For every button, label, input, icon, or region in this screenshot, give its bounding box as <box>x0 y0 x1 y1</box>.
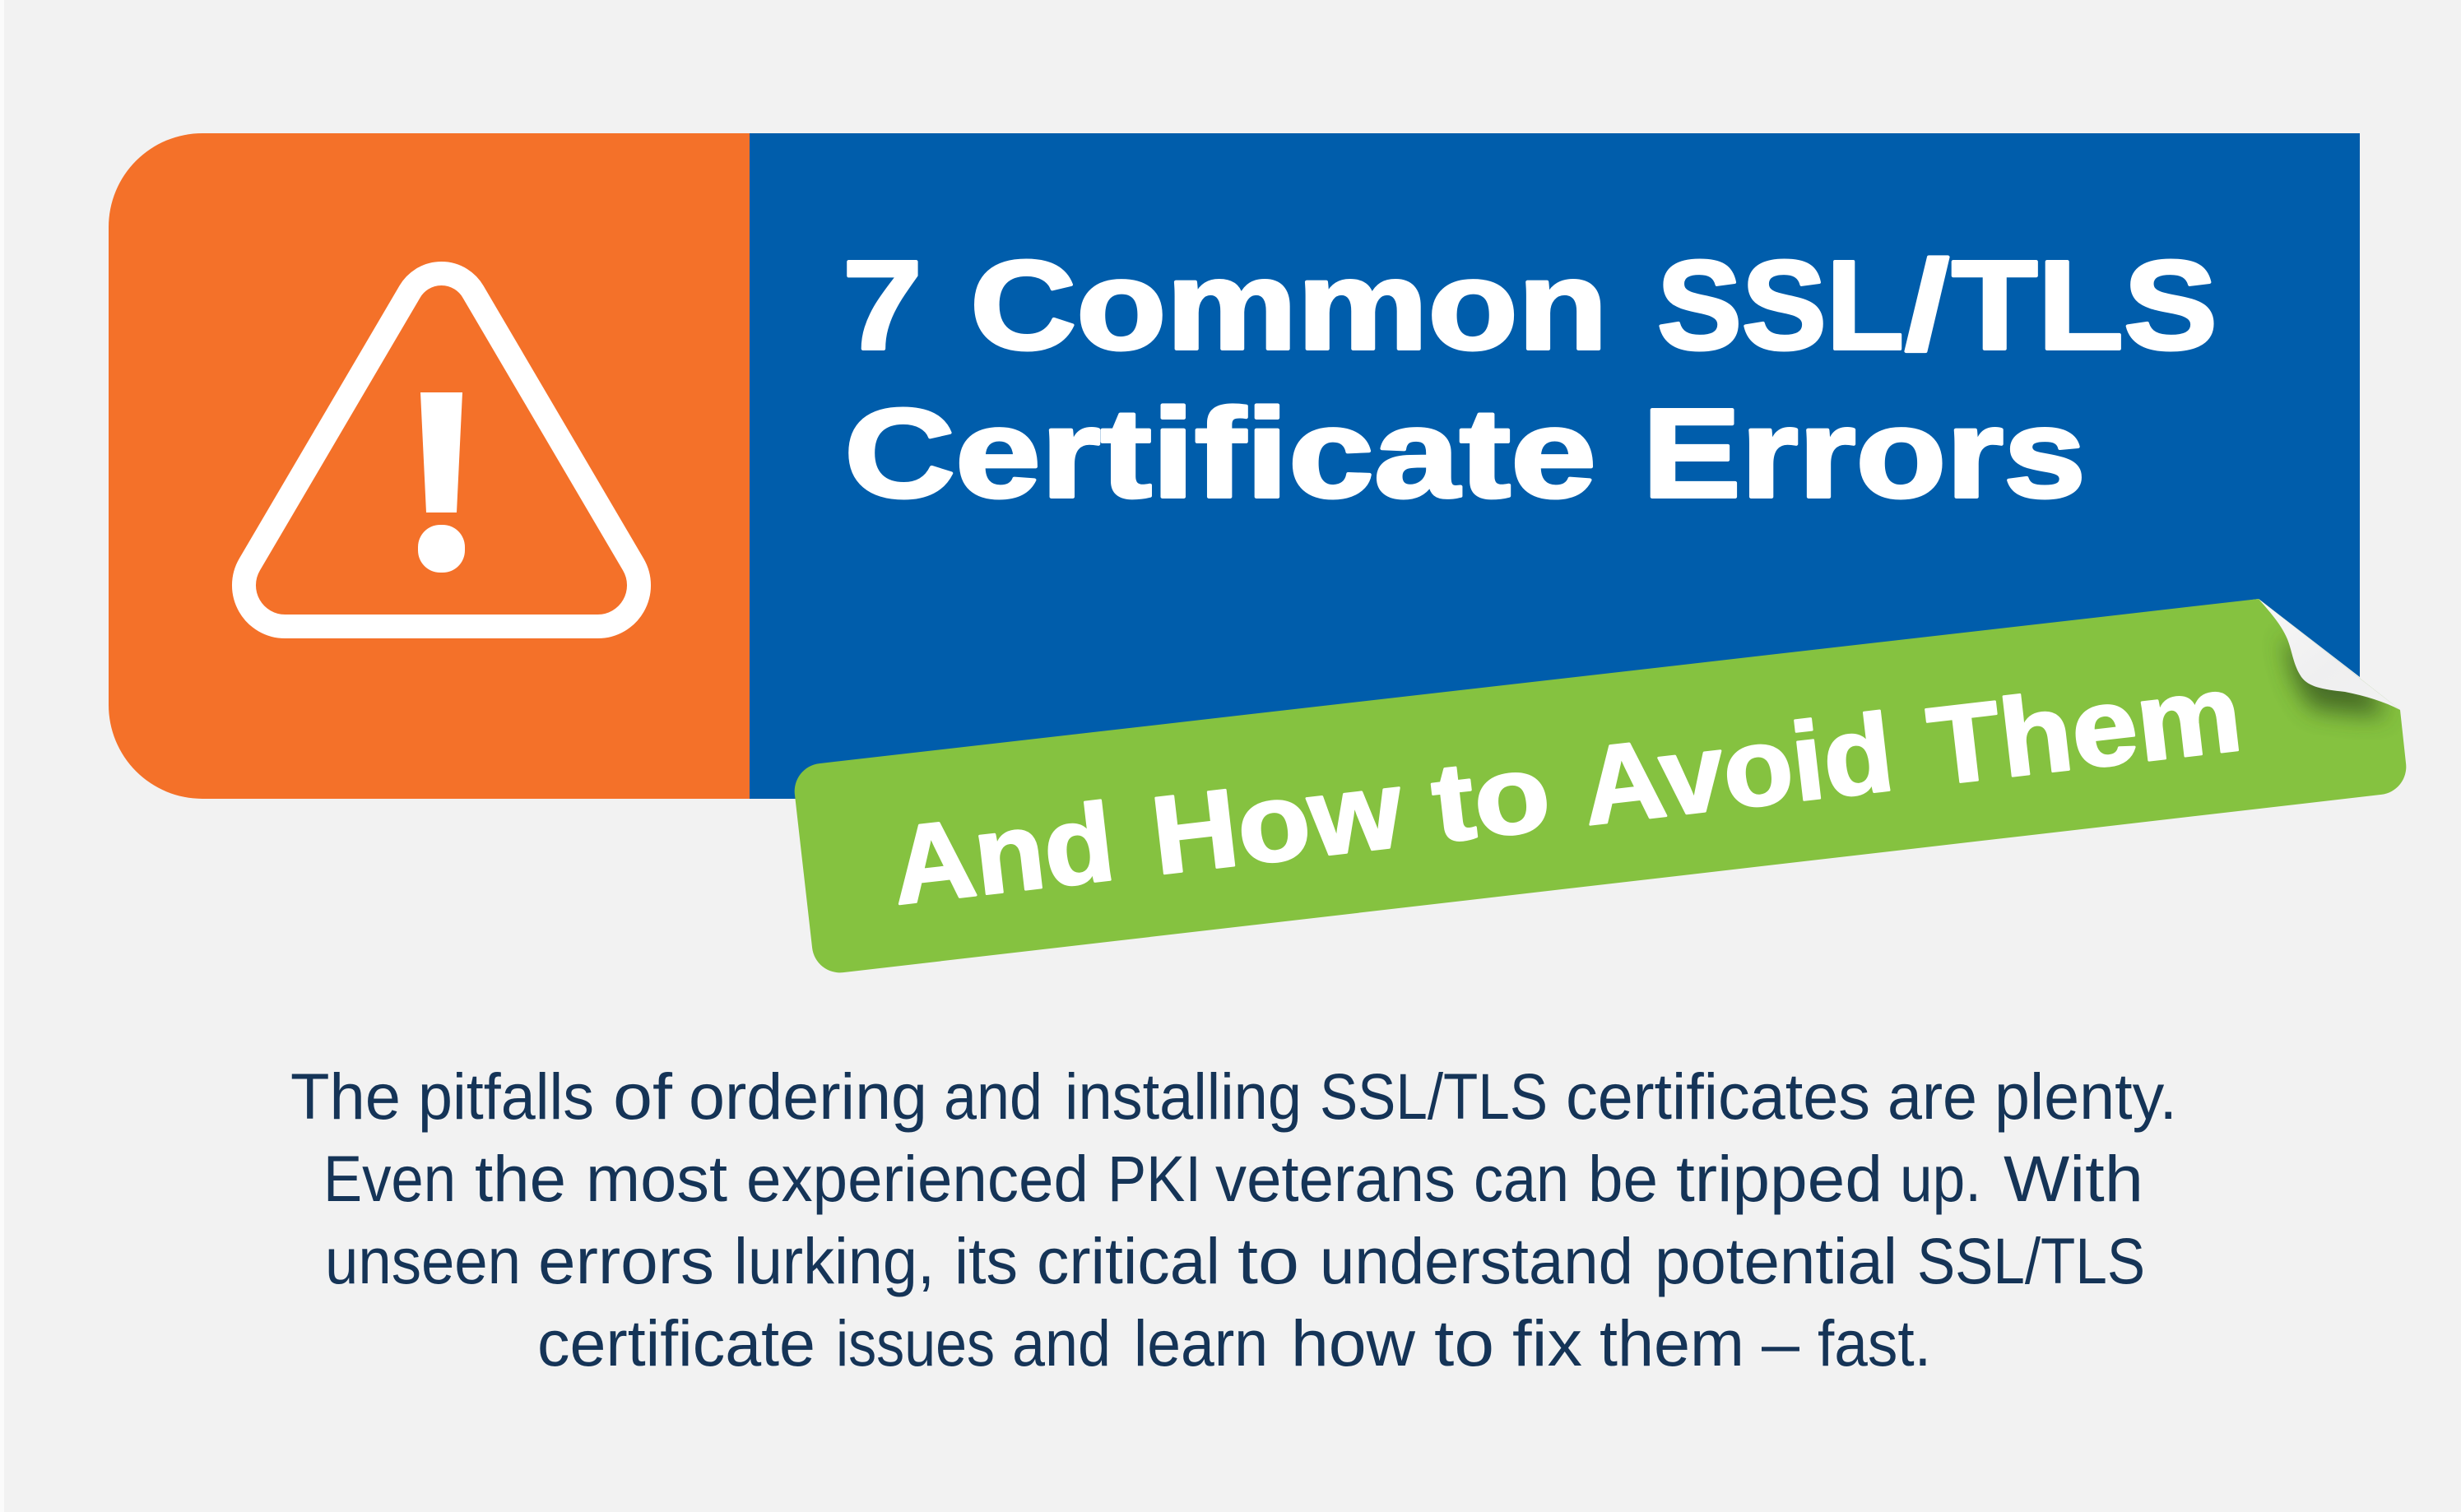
text block: introduction: can <box>1474 1142 1569 1215</box>
text block: introduction: tripped <box>1676 1142 1883 1215</box>
text block: introduction: are <box>1888 1060 1977 1133</box>
text block: introduction: to <box>1434 1306 1494 1380</box>
panel: green peeling sticker <box>795 599 2406 972</box>
title: Errors <box>1642 383 2086 524</box>
text block: introduction: to <box>1237 1224 1299 1297</box>
sticker text: Them <box>1922 652 2248 809</box>
text block: introduction: lurking, <box>734 1224 935 1297</box>
text block: introduction: them <box>1600 1306 1744 1380</box>
text block: introduction: certificates <box>1566 1060 1870 1133</box>
text block: introduction: issues <box>836 1306 995 1380</box>
text block: introduction: The <box>290 1060 401 1133</box>
text block: introduction: the <box>475 1142 566 1215</box>
text block: introduction: ordering <box>689 1060 927 1133</box>
icon: peeled sticker corner <box>2259 599 2400 710</box>
title: Certificate <box>844 383 1596 524</box>
text block: introduction: critical <box>1037 1224 1220 1297</box>
title: Common <box>970 234 1608 376</box>
text block: introduction: most <box>586 1142 727 1215</box>
text block: introduction: of <box>613 1060 673 1133</box>
text block: introduction: pitfalls <box>418 1060 594 1133</box>
text block: introduction: installing <box>1065 1060 1302 1133</box>
text block: introduction: fix <box>1512 1306 1582 1380</box>
text block: introduction: learn <box>1134 1306 1268 1380</box>
title: TLS <box>1952 234 2217 376</box>
text block: introduction: unseen <box>325 1224 521 1297</box>
text block: introduction: – <box>1762 1306 1799 1380</box>
icon: warning triangle <box>244 273 639 627</box>
title: 7 <box>843 234 922 376</box>
text block: introduction: SSL/TLS <box>1320 1060 1548 1133</box>
text block: introduction: fast. <box>1818 1306 1931 1380</box>
text block: introduction: With <box>2004 1142 2143 1215</box>
panel: orange icon panel <box>109 133 750 799</box>
text block: introduction: up. <box>1900 1142 1981 1215</box>
title: / <box>1905 234 1949 376</box>
text block: introduction: its <box>954 1224 1018 1297</box>
text block: introduction: and <box>1012 1306 1111 1380</box>
text block: introduction: PKI <box>1107 1142 1201 1215</box>
text block: introduction: SSL/TLS <box>1917 1224 2145 1297</box>
panel: blue title panel <box>750 133 2360 799</box>
text block: introduction: Even <box>323 1142 456 1215</box>
title <box>843 234 2217 524</box>
text block: introduction: plenty. <box>1994 1060 2177 1133</box>
sticker text: How <box>1145 748 1409 898</box>
text block: introduction: and <box>944 1060 1042 1133</box>
text block: introduction <box>290 1060 2177 1380</box>
text block: introduction: errors <box>538 1224 714 1297</box>
text block: introduction: potential <box>1655 1224 1897 1297</box>
text block: introduction: veterans <box>1215 1142 1456 1215</box>
title: SSL <box>1657 234 1904 376</box>
text block: introduction: certificate <box>537 1306 815 1380</box>
sticker text: Avoid <box>1576 691 1899 848</box>
sticker text <box>885 652 2248 928</box>
sticker text: to <box>1426 730 1556 865</box>
sticker text: And <box>885 781 1121 928</box>
text block: introduction: be <box>1588 1142 1658 1215</box>
text block: introduction: how <box>1291 1306 1416 1380</box>
text block: introduction: experienced <box>746 1142 1089 1215</box>
text block: introduction: understand <box>1320 1224 1633 1297</box>
